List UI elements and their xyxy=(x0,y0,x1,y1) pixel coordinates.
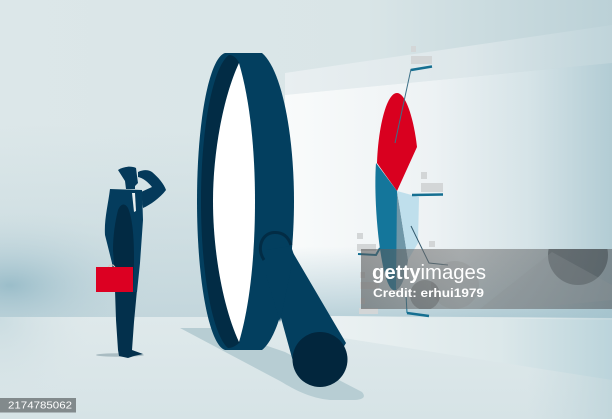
floor xyxy=(0,317,612,419)
slice: slate xyxy=(396,191,408,290)
ground shadow xyxy=(96,353,144,357)
stock id tag: 2174785062 xyxy=(8,400,72,412)
wall shading xyxy=(0,60,285,318)
handle end cap xyxy=(292,332,348,387)
watermark logo: gettyimages xyxy=(372,262,486,284)
briefcase xyxy=(96,265,133,292)
magnifier shadow on floor xyxy=(180,328,364,400)
raised arm xyxy=(138,170,166,208)
watermark credit: Credit: erhui1979 xyxy=(373,286,484,300)
jacket inner shadow xyxy=(113,204,134,292)
chart callout lines xyxy=(358,66,448,316)
wall glow xyxy=(0,150,200,318)
handle collar arc xyxy=(260,232,291,260)
magnifying glass xyxy=(197,53,348,387)
stock id tag xyxy=(0,398,76,412)
background wall xyxy=(0,0,612,318)
shirt and tie xyxy=(132,193,136,212)
handle xyxy=(262,251,346,386)
light beam from magnifier xyxy=(285,25,612,380)
inner rim xyxy=(201,55,240,348)
slice: teal xyxy=(375,163,397,290)
lens glass xyxy=(213,63,255,342)
watermark bar xyxy=(361,249,612,309)
watermark decorative shapes xyxy=(410,249,608,309)
lens ring xyxy=(197,53,294,350)
handle collar cover xyxy=(266,246,294,322)
slice: light blue xyxy=(397,191,419,260)
jacket xyxy=(105,189,143,292)
businessman xyxy=(96,167,166,358)
legs xyxy=(115,290,143,358)
pie chart xyxy=(357,46,448,316)
head xyxy=(118,167,138,189)
slice: red xyxy=(377,93,417,191)
chart label placeholders xyxy=(357,46,443,314)
